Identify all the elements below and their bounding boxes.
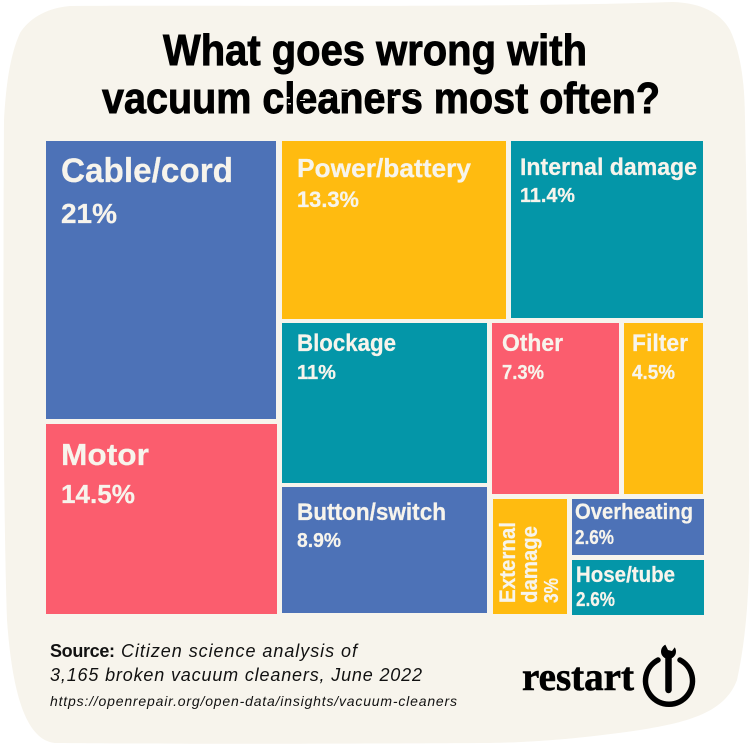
panel: other bbox=[492, 323, 619, 494]
panel: external damage: 3% bbox=[541, 578, 563, 603]
panel: power/battery: Power/battery bbox=[297, 153, 472, 183]
panel: hose/tube: 2.6% bbox=[576, 589, 615, 611]
logo: restart bbox=[522, 642, 692, 704]
treemap bbox=[46, 141, 704, 615]
panel: internal damage: 11.4% bbox=[520, 185, 575, 207]
panel: motor: 14.5% bbox=[61, 479, 135, 509]
panel: button/switch bbox=[282, 487, 487, 613]
logo: restart: restart bbox=[522, 654, 635, 699]
panel: cable/cord: 21% bbox=[61, 198, 117, 229]
panel: hose/tube bbox=[572, 560, 704, 615]
panel: filter bbox=[624, 323, 703, 494]
panel: other: 7.3% bbox=[502, 362, 544, 384]
source text: Citizen science analysis of bbox=[121, 641, 359, 661]
title bbox=[102, 26, 660, 123]
panel: overheating: 2.6% bbox=[575, 527, 614, 549]
panel: overheating bbox=[572, 499, 704, 555]
panel: filter: Filter bbox=[632, 330, 688, 357]
source text bbox=[50, 641, 457, 709]
panel: power/battery: 13.3% bbox=[297, 187, 359, 212]
title: vacuum cleaners most often? bbox=[102, 74, 660, 123]
panel: motor: Motor bbox=[61, 437, 149, 472]
panel: internal damage bbox=[511, 141, 703, 318]
panel: cable/cord: Cable/cord bbox=[61, 152, 233, 190]
panel: button/switch: Button/switch bbox=[297, 499, 446, 526]
panel: hose/tube: Hose/tube bbox=[576, 562, 675, 587]
panel: blockage bbox=[282, 323, 487, 483]
source text: 3,165 broken vacuum cleaners, June 2022 bbox=[50, 665, 422, 685]
panel: blockage: 11% bbox=[297, 362, 336, 384]
panel: overheating: Overheating bbox=[575, 499, 693, 524]
panel: button/switch: 8.9% bbox=[297, 530, 341, 552]
panel: motor bbox=[46, 424, 277, 614]
source text: https://openrepair.org/open-data/insights/vacuum-cleaners bbox=[50, 693, 457, 709]
panel: cable/cord bbox=[46, 141, 276, 419]
source text: Source: bbox=[50, 641, 115, 661]
panel: internal damage: Internal damage bbox=[520, 154, 697, 181]
panel: filter: 4.5% bbox=[632, 362, 675, 384]
panel: external damage bbox=[493, 499, 567, 614]
panel: other: Other bbox=[502, 330, 563, 357]
panel: external damage: External bbox=[495, 522, 520, 603]
panel: blockage: Blockage bbox=[297, 330, 396, 357]
icon: power symbol with wrench bbox=[646, 642, 692, 704]
panel: external damage: damage bbox=[517, 526, 542, 603]
panel: power/battery bbox=[282, 141, 506, 319]
title: What goes wrong with bbox=[163, 26, 587, 75]
